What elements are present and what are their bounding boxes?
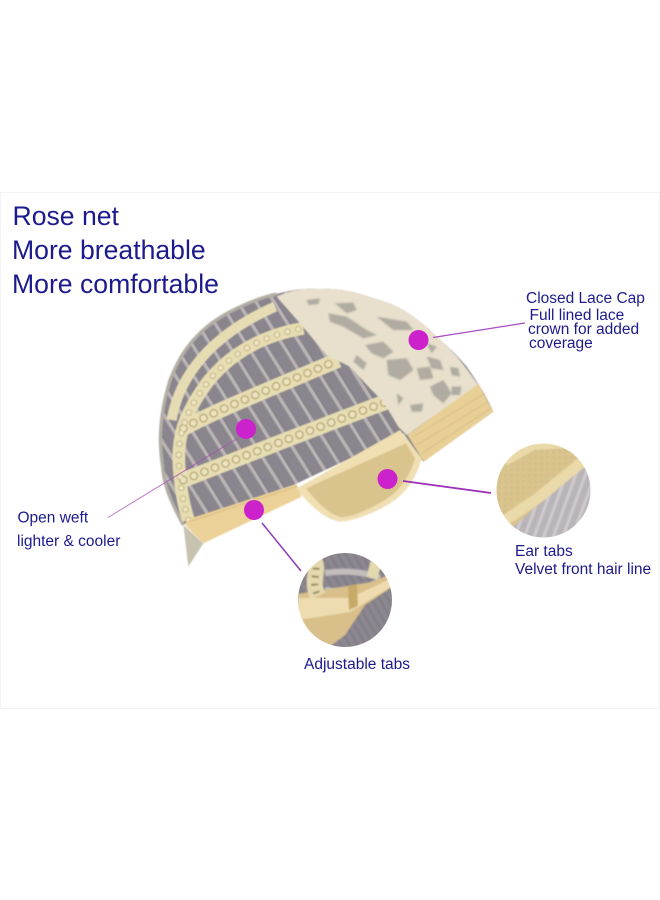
label: Velvet front hair line: [515, 561, 651, 578]
leader line: [433, 323, 525, 338]
callout: adjustable tabs: [244, 500, 410, 673]
label: [515, 543, 651, 578]
outer rim: [160, 294, 277, 525]
wig cap illustration: [150, 280, 503, 567]
label: Closed Lace Cap: [526, 290, 645, 307]
label: Full lined lace: [530, 307, 624, 324]
label: [17, 510, 120, 550]
cap tip: [183, 525, 203, 567]
label: Adjustable tabs: [304, 656, 410, 673]
heading: rose net benefits: More comfortable: [12, 269, 219, 299]
marker dot: [378, 469, 398, 489]
ear tab: [297, 430, 422, 522]
closed lace crown: [277, 289, 478, 435]
callout: open weft: [17, 419, 256, 550]
label: crown for added: [528, 321, 639, 338]
white panel frame: [0, 192, 660, 708]
leader line: [262, 523, 301, 571]
label: [526, 290, 645, 352]
label: Ear tabs: [515, 543, 573, 560]
marker dot: [244, 500, 264, 520]
callout: closed lace cap: [408, 290, 645, 352]
heading: rose net benefits: Rose net: [12, 201, 120, 231]
front band: [185, 484, 302, 543]
leader line: [108, 438, 238, 518]
label: Open weft: [18, 510, 89, 526]
open weft crown: [161, 288, 494, 524]
marker dot: [236, 419, 256, 439]
marker dot: [408, 330, 428, 350]
callout: ear tabs: [378, 438, 651, 578]
tan rim right: [407, 384, 493, 462]
ear tab detail circle: [496, 444, 590, 538]
heading: rose net benefits: [12, 201, 219, 299]
label: coverage: [529, 335, 593, 352]
label: lighter & cooler: [17, 533, 120, 550]
heading: rose net benefits: More breathable: [12, 235, 206, 265]
lace bands: [172, 307, 387, 520]
adjustable tabs detail circle: [298, 553, 392, 647]
leader line: [403, 481, 491, 493]
